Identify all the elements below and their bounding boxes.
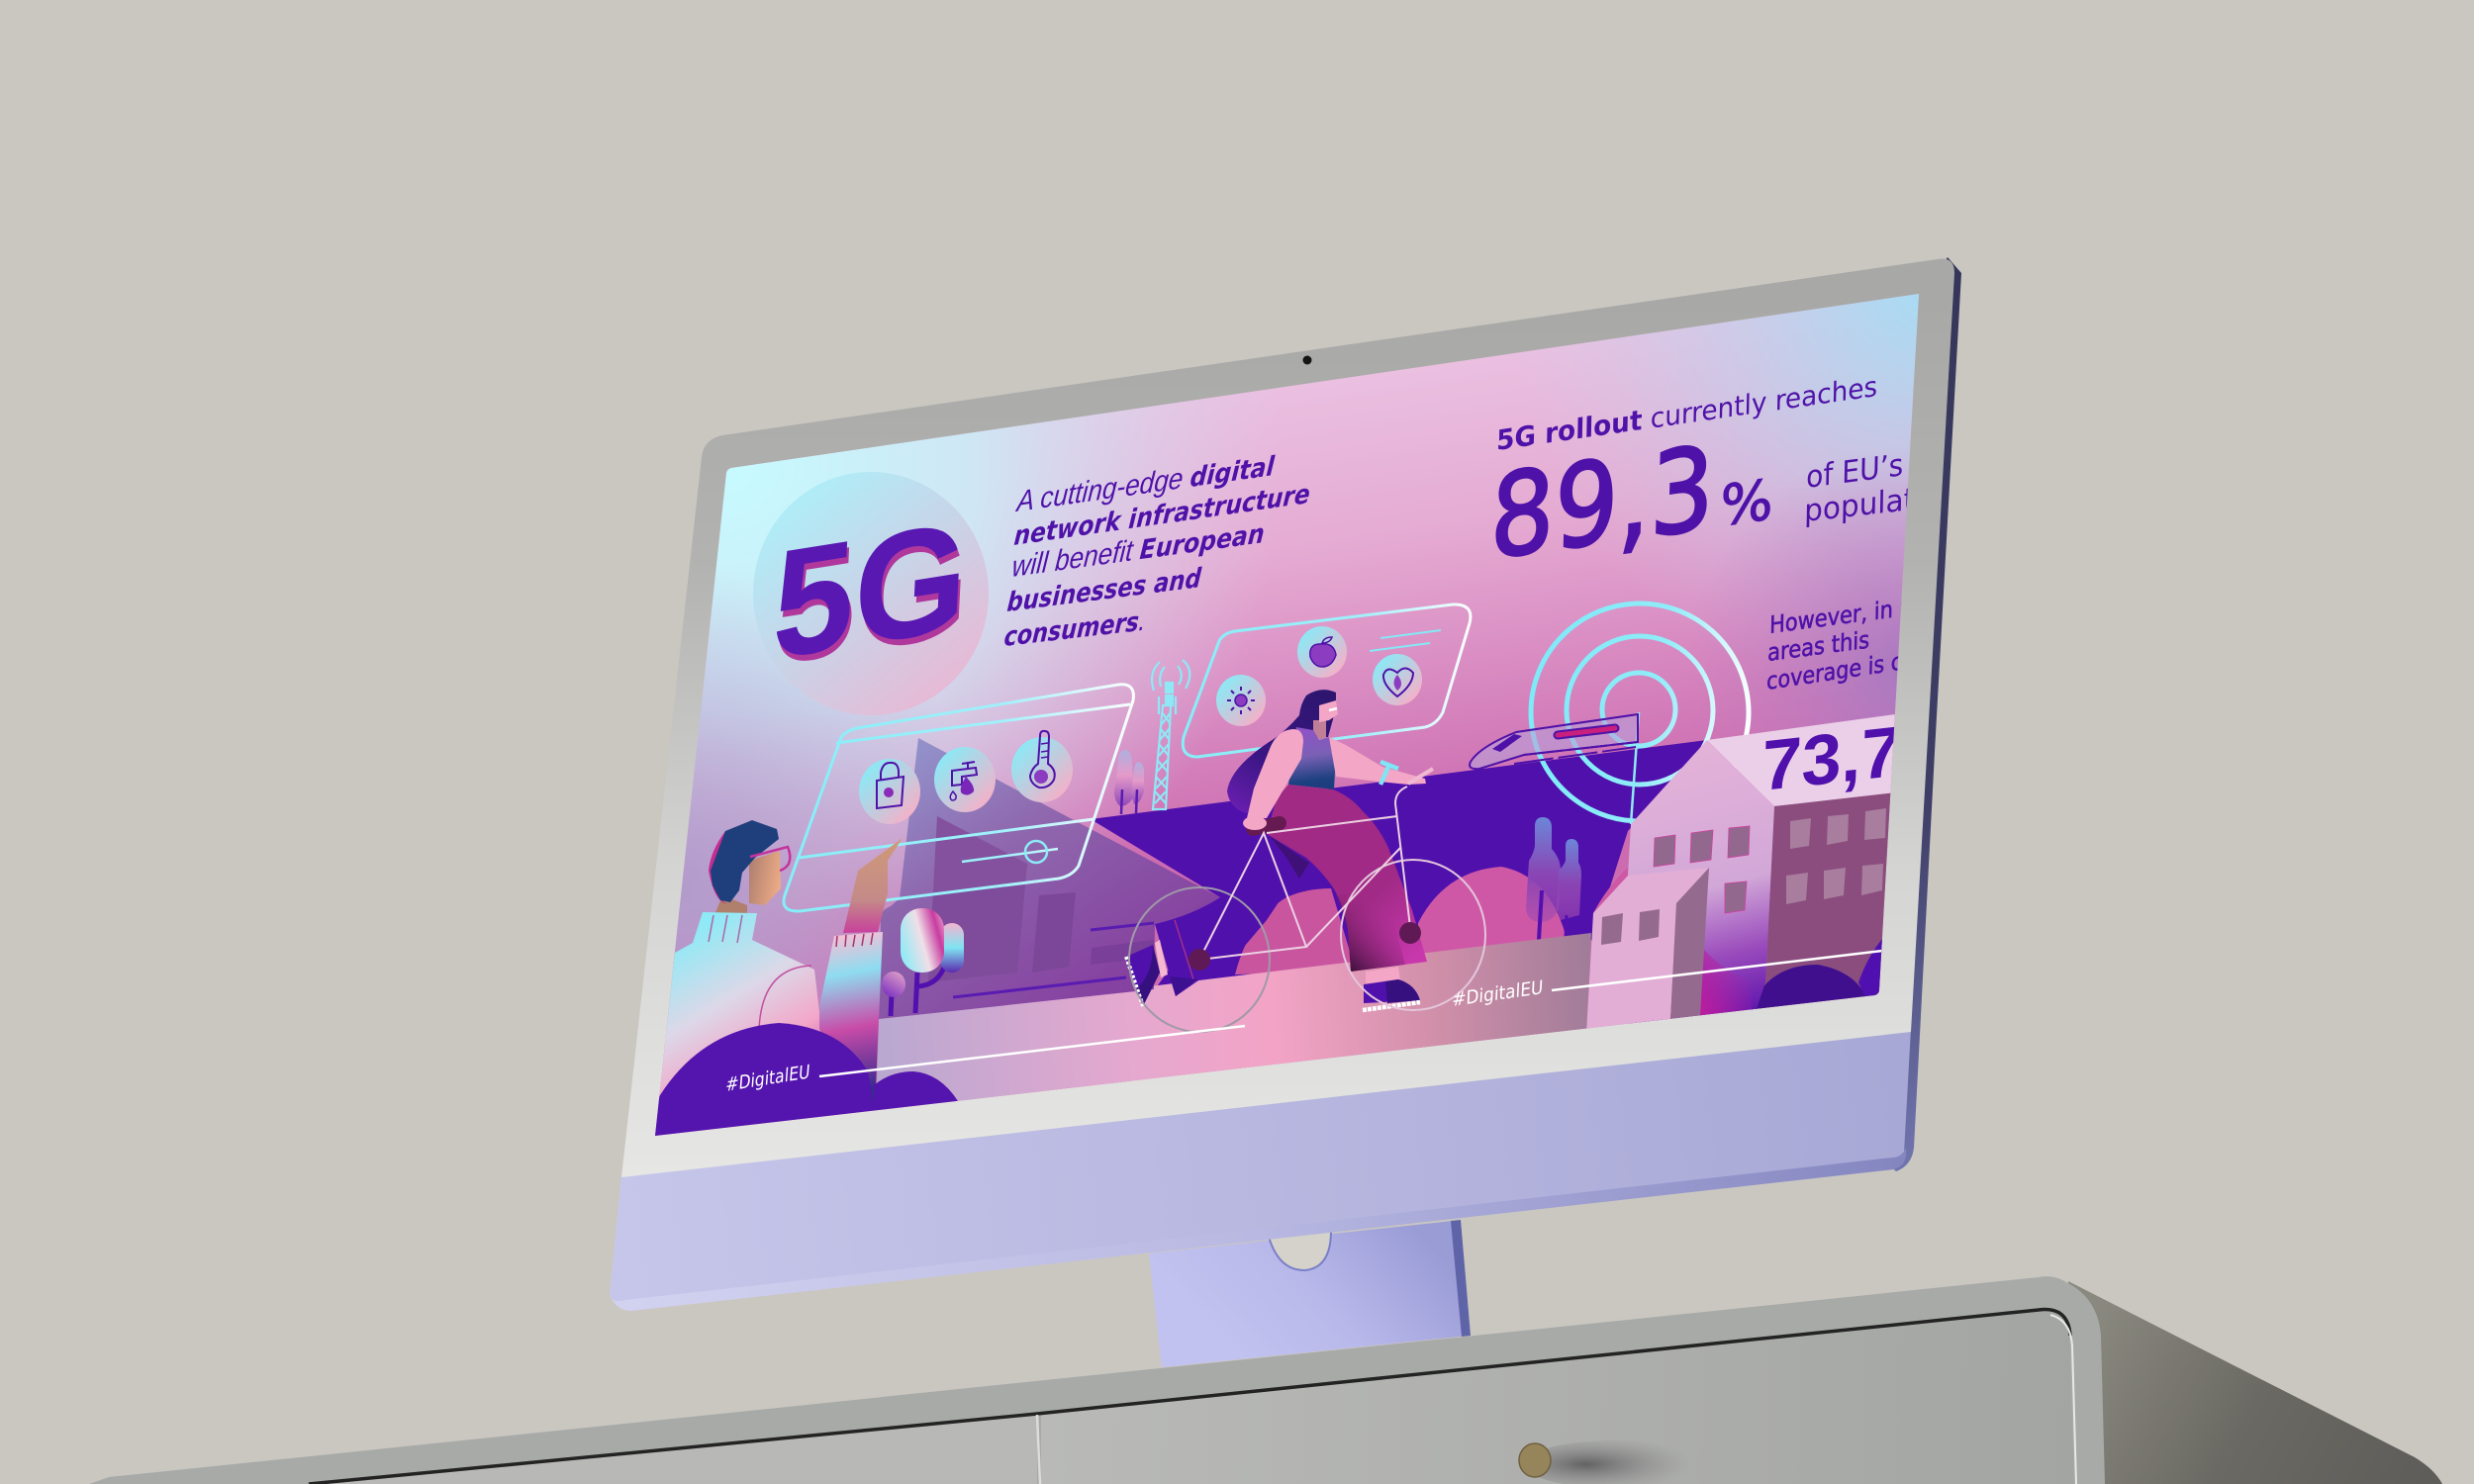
hashtag left: #DigitalEU: [725, 1061, 810, 1096]
stand cable notch: [1269, 1231, 1331, 1270]
purple landscape block: [1091, 740, 1707, 999]
dark arches: [1750, 965, 1867, 1011]
rural coverage note: However, in r: [1769, 594, 1909, 639]
rural coverage note: [1766, 594, 1909, 696]
rollout heading: 5G rollout currently reaches: [1496, 370, 1878, 457]
population note: of EU’s: [1806, 447, 1904, 496]
icon: apple: [1297, 626, 1347, 678]
hair: [1227, 690, 1336, 813]
hand on saddle: [1243, 816, 1267, 830]
population note: populat: [1804, 482, 1916, 529]
monitor side edge: [1880, 257, 1961, 1171]
cabinet side: [2068, 1281, 2442, 1484]
stat 73,7: 73,7: [1761, 712, 1902, 806]
rural coverage note: coverage is c: [1766, 648, 1902, 696]
face: [1319, 700, 1338, 722]
population note: [1804, 447, 1916, 529]
icon: sun: [1216, 675, 1266, 726]
hashtag left: [725, 1026, 1245, 1096]
icon: heart: [1373, 654, 1422, 705]
pink hills: [1235, 867, 1628, 974]
sleeve: [819, 932, 883, 1108]
intro text: consumers.: [1002, 604, 1147, 653]
hair outline: [709, 831, 727, 904]
right arm: [1329, 737, 1426, 785]
monitor chin: [610, 1029, 1911, 1311]
knob shadow: [1524, 1440, 1702, 1484]
hashtag right: [1452, 951, 1882, 1011]
label panel: [1707, 712, 1910, 806]
coverage statistic text: [1488, 370, 1916, 696]
fold shadow: [1270, 836, 1309, 879]
drawer gap: [1037, 1415, 1040, 1484]
person pointing at panel: [653, 820, 903, 1113]
purple domes: [643, 1023, 958, 1153]
neck: [714, 895, 747, 915]
woman on a bicycle: [1126, 690, 1485, 1032]
ground plane: [876, 933, 1591, 1118]
finger on handlebar: [1408, 769, 1433, 784]
5G heading: 5G: [769, 490, 972, 693]
collar lines: [709, 915, 742, 943]
hashtag right: #DigitalEU: [1452, 975, 1544, 1011]
drawer shadow line: [309, 1310, 2070, 1484]
stat 89,3%: 89,3: [1488, 422, 1716, 586]
face: [749, 851, 781, 905]
glass panel: sun, food, health: [1183, 604, 1471, 757]
distant trees: [1114, 750, 1144, 814]
intro text: businesses and: [1005, 563, 1202, 618]
sock: [1155, 940, 1168, 977]
stat 89,3%: %: [1720, 468, 1774, 539]
intro text: [1002, 449, 1311, 653]
hair: [711, 820, 779, 902]
screen background: [633, 277, 1940, 1148]
windows: [1654, 826, 1750, 913]
mouth: [1329, 708, 1337, 710]
screen infographic: [633, 277, 1940, 1153]
monitor bezel: [621, 259, 1954, 1177]
concentric signal rings: [1531, 603, 1749, 824]
5G antenna tower: [1152, 660, 1189, 809]
wheel hubs: [1189, 922, 1421, 971]
left arm: [1247, 729, 1303, 818]
drawer knob: [1519, 1443, 1551, 1477]
glasses: [750, 847, 790, 871]
drawer highlight: [2050, 1315, 2076, 1484]
drawer face right: [1041, 1311, 2074, 1484]
sweater: [653, 912, 821, 1113]
intro text: will benefit European: [1010, 516, 1266, 584]
front shoe: [1363, 979, 1420, 1010]
glass panel: security, water, temperature: [784, 685, 1133, 911]
leg seam: [1175, 920, 1194, 982]
rear houses with 73,7 label: [1707, 714, 1895, 1009]
foreground trees: [1526, 817, 1581, 940]
dark house windows: [1786, 808, 1886, 904]
cabinet: [89, 1276, 2442, 1484]
5G badge: [753, 472, 989, 715]
icon: padlock: [859, 759, 920, 824]
thigh and lower leg: [1267, 785, 1427, 972]
neck: [1313, 720, 1326, 740]
back leg: [1155, 890, 1286, 996]
webcam: [1302, 356, 1312, 364]
front small house: [1586, 868, 1709, 1034]
intro text: A cutting-edge digital: [1014, 449, 1277, 518]
scene: monitor on a cabinet: [89, 257, 2442, 1484]
front sock: [1366, 967, 1400, 985]
backpack outline: [759, 966, 811, 1029]
bicycle: [1129, 787, 1485, 1032]
chin bottom lip: [610, 1148, 1906, 1311]
icon: water tap: [934, 747, 996, 812]
back shoe: [1126, 945, 1160, 1006]
drawer face left: [309, 1414, 1037, 1484]
cuff lines: [836, 933, 873, 947]
slider: [962, 849, 1058, 862]
wristband: [1380, 762, 1398, 785]
intro text: network infrastructure: [1012, 479, 1311, 552]
translucent city building: [879, 738, 1220, 1019]
cabinet top edge: [89, 1276, 2105, 1484]
torso: [1288, 727, 1336, 789]
icon: thermometer: [1011, 731, 1073, 802]
5G shadow: 5G: [771, 496, 974, 698]
saddle: [1253, 823, 1280, 829]
tall pink house: [1628, 740, 1774, 1029]
dark house: [1752, 791, 1905, 1019]
high-speed train: [1470, 714, 1638, 769]
ankle shade: [1170, 976, 1197, 996]
arm and hand: [843, 838, 903, 933]
rural coverage note: areas this: [1767, 626, 1869, 667]
monitor stand: [1149, 1220, 1471, 1367]
gradient pill trees: [882, 908, 964, 1016]
